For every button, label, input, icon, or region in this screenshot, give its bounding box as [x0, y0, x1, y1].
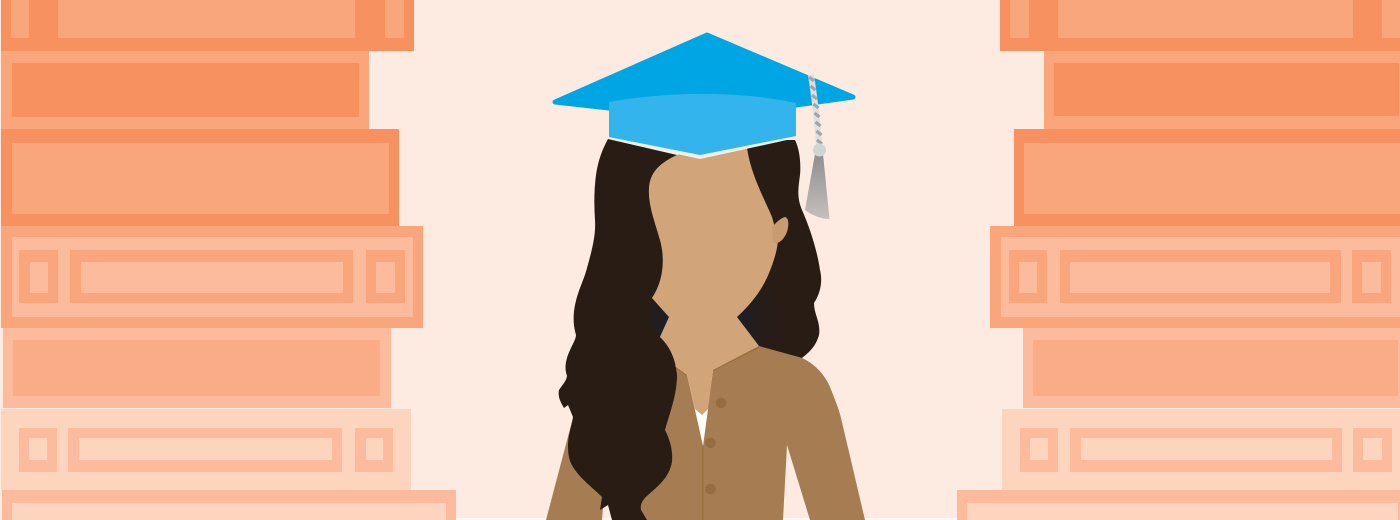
book: left 1: [1, 0, 414, 51]
cap white brim: [609, 135, 796, 159]
tassel cord: [809, 75, 822, 147]
book: right 6: [1002, 409, 1400, 490]
book: right 1: [1000, 0, 1400, 51]
book: right 7: [957, 490, 1400, 520]
graduation cap: [555, 35, 853, 219]
book: right 2: [1044, 51, 1400, 129]
jacket: [546, 346, 865, 520]
cap board: [555, 35, 853, 108]
hair: front left: [559, 139, 677, 520]
face and neck: [649, 148, 778, 415]
book: left 5: [3, 328, 391, 408]
tassel knob: [813, 144, 826, 156]
book: left 7: [2, 490, 456, 520]
tassel: [805, 75, 830, 219]
left book stack: [1, 0, 456, 520]
book: left 6: [1, 409, 411, 490]
jacket placket line: [702, 445, 704, 520]
book: left 2: [1, 51, 369, 129]
jacket collar line: [676, 347, 759, 375]
book: right 4: [990, 226, 1400, 328]
book: right 3: [1014, 129, 1400, 226]
hair shadow: right navy: [737, 280, 775, 352]
cap band: [609, 94, 796, 155]
right book stack: [957, 0, 1400, 520]
jacket left sleeve: [546, 410, 610, 520]
graduate figure: [546, 35, 865, 520]
ear: [772, 217, 788, 243]
hair shadow: left navy: [645, 298, 669, 337]
book: left 3: [1, 129, 399, 226]
buttons: [705, 398, 726, 494]
book: right 5: [1023, 328, 1400, 408]
book: left 4: [1, 226, 423, 328]
hair: back right: [720, 140, 821, 358]
shirt: white V: [695, 409, 708, 446]
tassel fringe: [805, 154, 830, 219]
jacket body and right sleeve: [640, 346, 865, 520]
